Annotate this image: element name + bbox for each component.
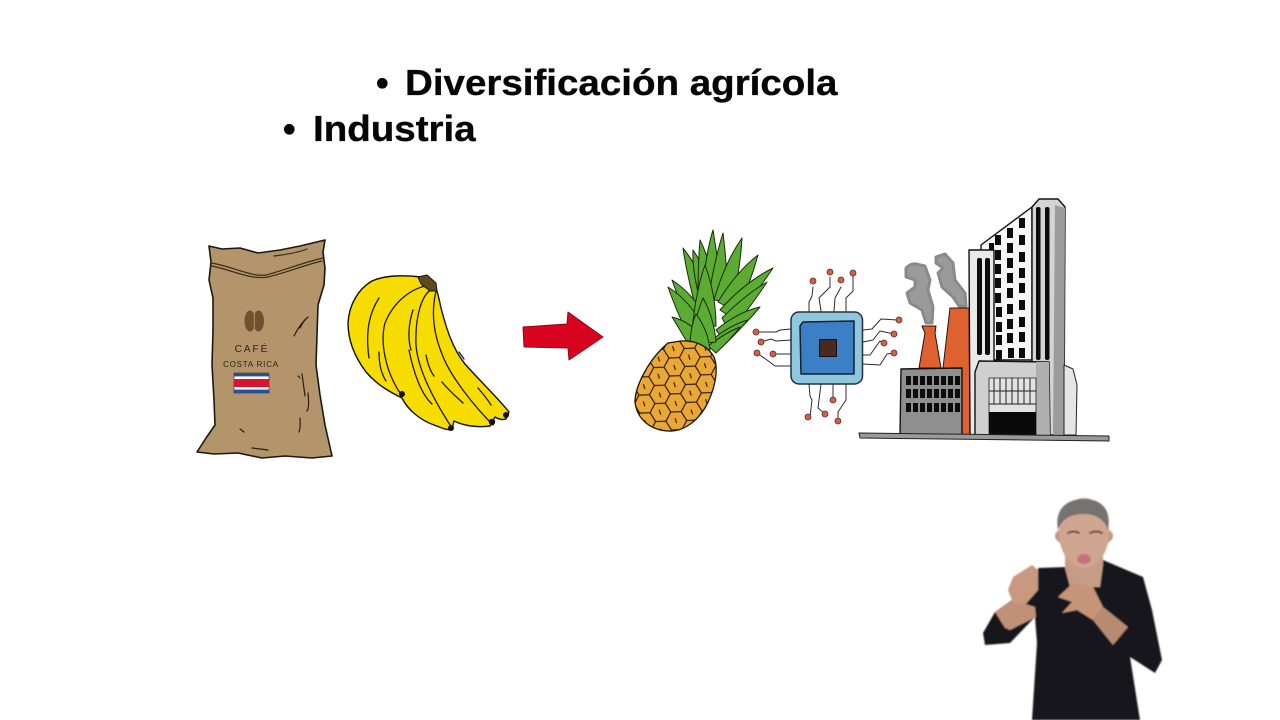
sack label: café Costa Rica: COSTA RICA: [223, 360, 279, 369]
arrow: red transition arrow: [523, 312, 603, 360]
tower windows: [989, 218, 1025, 360]
bullet text: Diversificación agrícola: •: [376, 62, 389, 103]
sack label: café Costa Rica: [223, 342, 279, 369]
interpreter jacket: [983, 560, 1162, 720]
entrance block: [975, 361, 1050, 436]
icon: coffee sack: [197, 240, 332, 458]
icon: microchip: [753, 269, 902, 424]
pineapple fruit: [635, 341, 716, 431]
annex: [1064, 365, 1077, 435]
banana tips: [399, 391, 509, 431]
sign language interpreter: [983, 498, 1162, 720]
bullet text: Industria: Industria: [313, 108, 476, 149]
interpreter forearm: left: [995, 600, 1036, 630]
bullet text: Diversificación agrícola: Diversificación agrícola: [405, 62, 837, 103]
interpreter face: [1068, 532, 1102, 564]
orange chimneys: [919, 308, 970, 435]
bullet text: Industria: •: [283, 108, 296, 149]
icon: pineapple: [635, 230, 773, 431]
smoke plumes: [906, 254, 966, 323]
chip traces and contacts: [757, 276, 898, 417]
factory building: [900, 368, 962, 435]
icon: Costa Rica flag: [234, 373, 269, 393]
interpreter forearm: right: [1093, 607, 1128, 645]
ground slab: [859, 433, 1109, 441]
interpreter head: [1059, 498, 1109, 568]
icon: bananas: [348, 275, 509, 431]
interpreter hand: right fist: [1008, 565, 1038, 605]
interpreter hair: [1057, 499, 1109, 530]
interpreter neck: [1065, 550, 1103, 587]
icon: coffee bean: [244, 310, 264, 332]
interpreter hand: left hand: [1058, 583, 1103, 620]
pineapple crown: [668, 230, 773, 353]
sack label: café Costa Rica: CAFÉ: [235, 342, 269, 355]
interpreter ears: [1055, 524, 1113, 548]
icon: factory and office tower: [859, 199, 1109, 441]
office tower: [981, 207, 1032, 360]
